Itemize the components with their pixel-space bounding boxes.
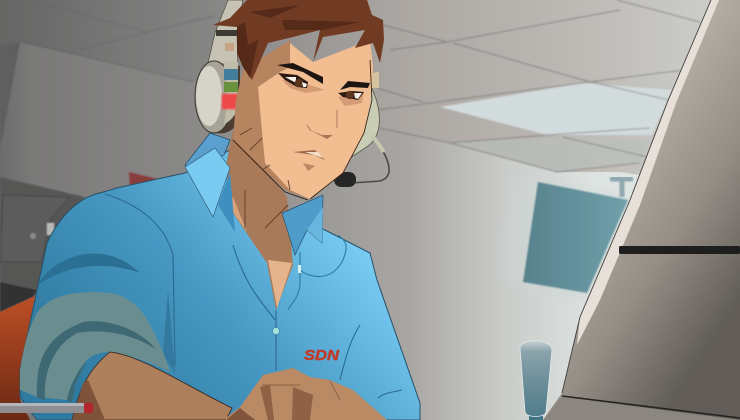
mouth [293, 150, 325, 160]
microphone cable [288, 235, 346, 310]
headset [195, 0, 389, 187]
wall cabinet [0, 177, 85, 312]
ceiling [0, 0, 740, 190]
mic boom [352, 136, 389, 183]
chair [0, 296, 35, 420]
forearm [72, 352, 232, 420]
wall poster [129, 172, 162, 190]
nose [307, 110, 337, 131]
right ear cup [340, 78, 379, 158]
panel slot [619, 246, 740, 254]
headset panel [223, 62, 238, 124]
hand [226, 368, 387, 420]
left eyebrow [277, 63, 323, 84]
shirt logo: SDN [304, 347, 340, 364]
pen [0, 403, 93, 413]
face shadow side [233, 40, 310, 199]
hair [213, 0, 384, 80]
collar right [282, 195, 323, 255]
panel light edge [577, 0, 719, 345]
shirt creases [105, 194, 402, 398]
right eyebrow [340, 81, 370, 90]
shirt sleeve fold shadow [38, 254, 140, 285]
left eye [282, 80, 325, 93]
left ear cup [212, 62, 240, 133]
face [233, 40, 373, 200]
right eye [338, 92, 364, 106]
panel bottom seam [562, 396, 740, 418]
microphone [334, 172, 356, 187]
face light side [258, 40, 373, 199]
chest highlight [268, 260, 292, 308]
headband [208, 0, 243, 73]
neck [225, 130, 293, 310]
rolled sleeve [20, 292, 170, 400]
console panel [543, 0, 740, 420]
wall-mounted screen [498, 178, 633, 300]
panel base [543, 397, 740, 420]
hair shadow strands [237, 5, 360, 78]
joystick [520, 341, 552, 420]
collar left [185, 133, 235, 232]
stubble [240, 128, 290, 190]
headset buttons [224, 69, 238, 80]
ceiling tiles [20, 0, 700, 172]
shirt [20, 150, 420, 420]
shirt button [272, 327, 280, 335]
